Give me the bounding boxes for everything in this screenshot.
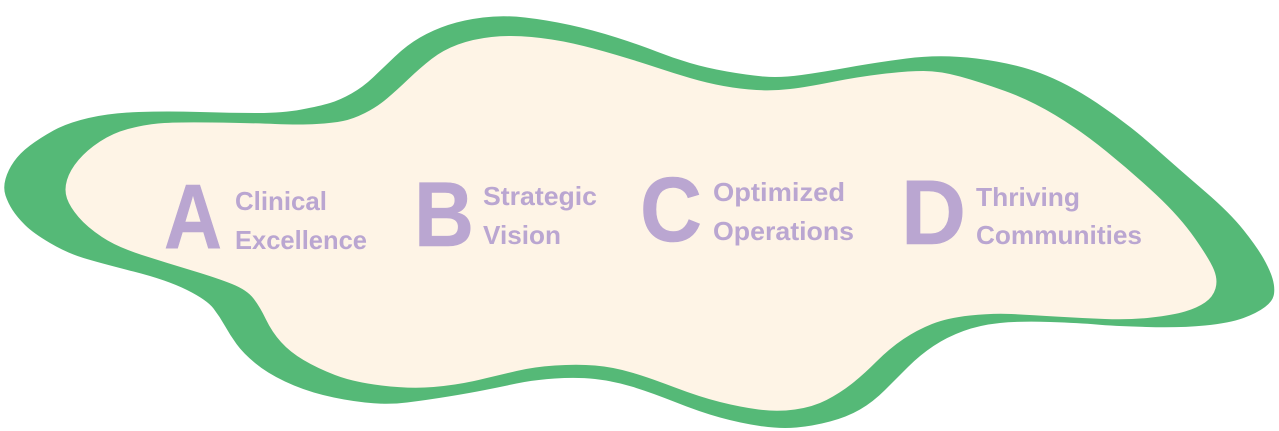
label: Thriving: Thriving	[976, 182, 1080, 212]
pillar D: Thriving Communities	[901, 162, 1142, 264]
cream blob foreground	[66, 36, 1216, 411]
pillar C: Optimized Operations	[640, 159, 854, 261]
label: Communities: Communities	[976, 220, 1142, 250]
label: Optimized: Optimized	[713, 177, 845, 207]
label: Strategic: Strategic	[483, 181, 597, 211]
label: Operations: Operations	[713, 216, 854, 246]
label: Vision: Vision	[483, 220, 561, 250]
letter B: B	[414, 164, 474, 266]
letter D: D	[901, 162, 966, 264]
label: Excellence: Excellence	[235, 225, 367, 255]
letter A: A	[164, 166, 222, 268]
pillar B: Strategic Vision	[414, 164, 597, 266]
pillar A: Clinical Excellence	[164, 166, 367, 268]
label: Clinical: Clinical	[235, 186, 327, 216]
letter C: C	[640, 159, 702, 261]
